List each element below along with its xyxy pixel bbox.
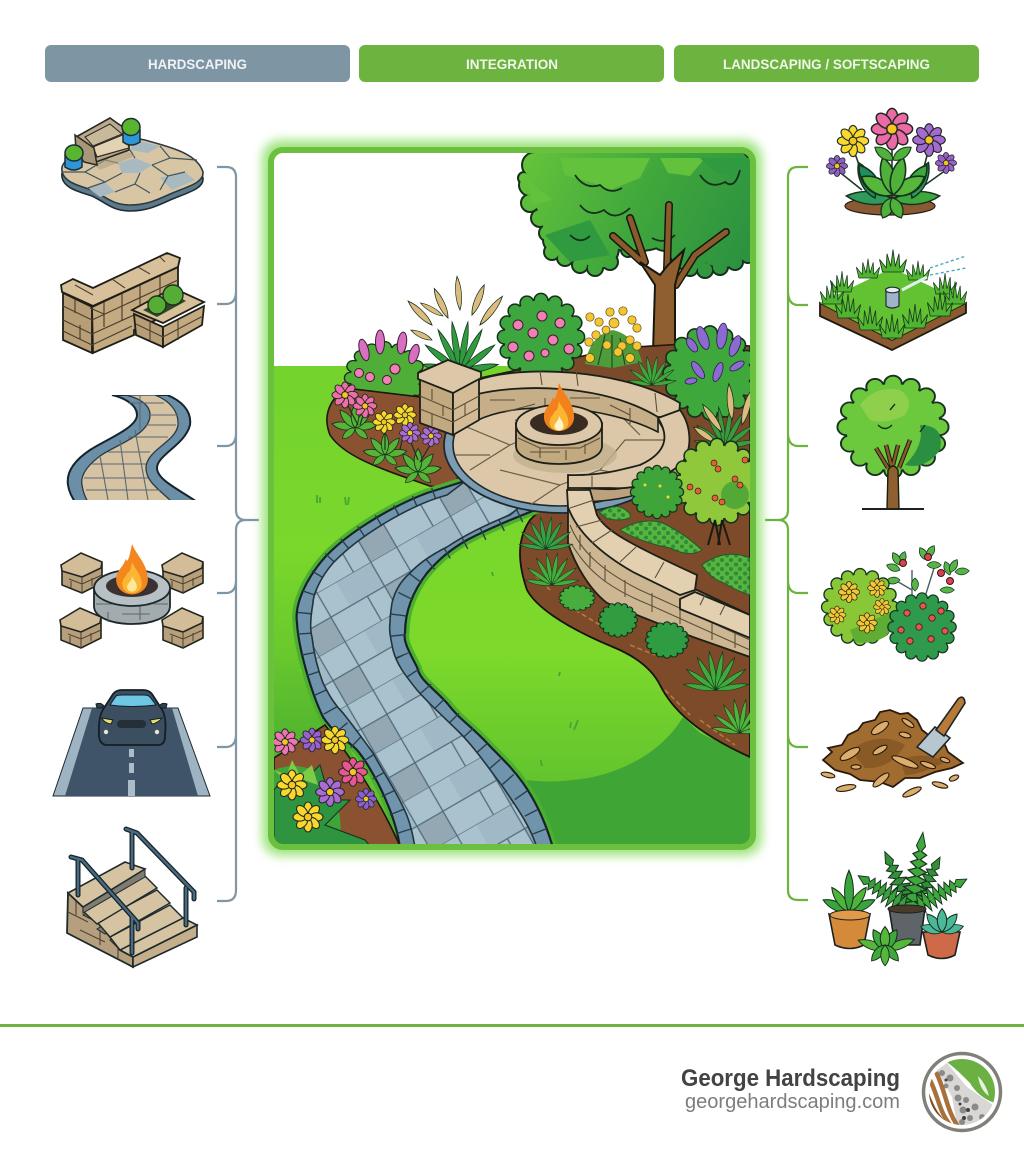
heading: integration: INTEGRATION [466, 56, 558, 72]
icon: winding paver walkway [68, 395, 197, 502]
flowering round shrub [498, 294, 584, 380]
panel: integrated landscape scene [262, 135, 769, 856]
icon: stone retaining wall with planter [61, 253, 204, 353]
back planting bed [480, 343, 750, 470]
corner flower bed [272, 725, 400, 846]
stone pillar [418, 360, 481, 435]
yellow flowering shrub [585, 307, 642, 368]
stone walkway [297, 470, 553, 848]
right planting bed [520, 480, 750, 757]
icon: car on driveway [53, 690, 210, 796]
tan grass right of patio [693, 382, 750, 448]
icon: tree [838, 377, 948, 509]
ornamental grass [406, 276, 505, 375]
heading: integration [359, 45, 664, 82]
scene artwork [272, 135, 769, 848]
heading: hardscaping [45, 45, 350, 82]
heading: landscaping / softscaping: LANDSCAPING / SOFTSCAPING [723, 56, 930, 72]
small garden plants [519, 517, 769, 735]
patio coping curve [568, 410, 689, 503]
left planting bed [327, 382, 465, 490]
heading: hardscaping: HARDSCAPING [148, 56, 247, 72]
icon: shrubs with flowers and berries [822, 544, 970, 661]
icon: flagstone patio with bench [62, 118, 203, 211]
brand name: George Hardscaping [681, 1065, 900, 1092]
small yellow-dotted bush [631, 466, 683, 518]
footer rule [0, 1024, 1024, 1027]
ground cover clusters [599, 507, 750, 595]
berry bush [675, 438, 750, 546]
small fern by trunk [628, 356, 676, 387]
logo [924, 1054, 1000, 1130]
pink spike flowers [344, 330, 424, 396]
icon: fire pit with stone seats [60, 544, 203, 648]
icon: potted plants [821, 831, 972, 966]
icon: stone stairs with handrails [67, 829, 197, 967]
brand website: georgehardscaping.com [685, 1091, 900, 1113]
bracket: landscaping connectors [765, 167, 808, 900]
tree [517, 153, 750, 346]
heading: landscaping / softscaping [674, 45, 979, 82]
icon: lawn with sprinkler [820, 250, 967, 350]
lavender shrub [664, 322, 756, 419]
fire pit [516, 383, 602, 464]
icon: flower cluster [826, 108, 957, 220]
curved seat wall [478, 370, 680, 432]
bracket: hardscaping connectors [217, 167, 259, 901]
lawn tufts [317, 495, 578, 766]
patio with flagstones [443, 409, 664, 514]
retaining wall [567, 490, 750, 657]
icon: mulch pile with trowel [821, 697, 965, 799]
